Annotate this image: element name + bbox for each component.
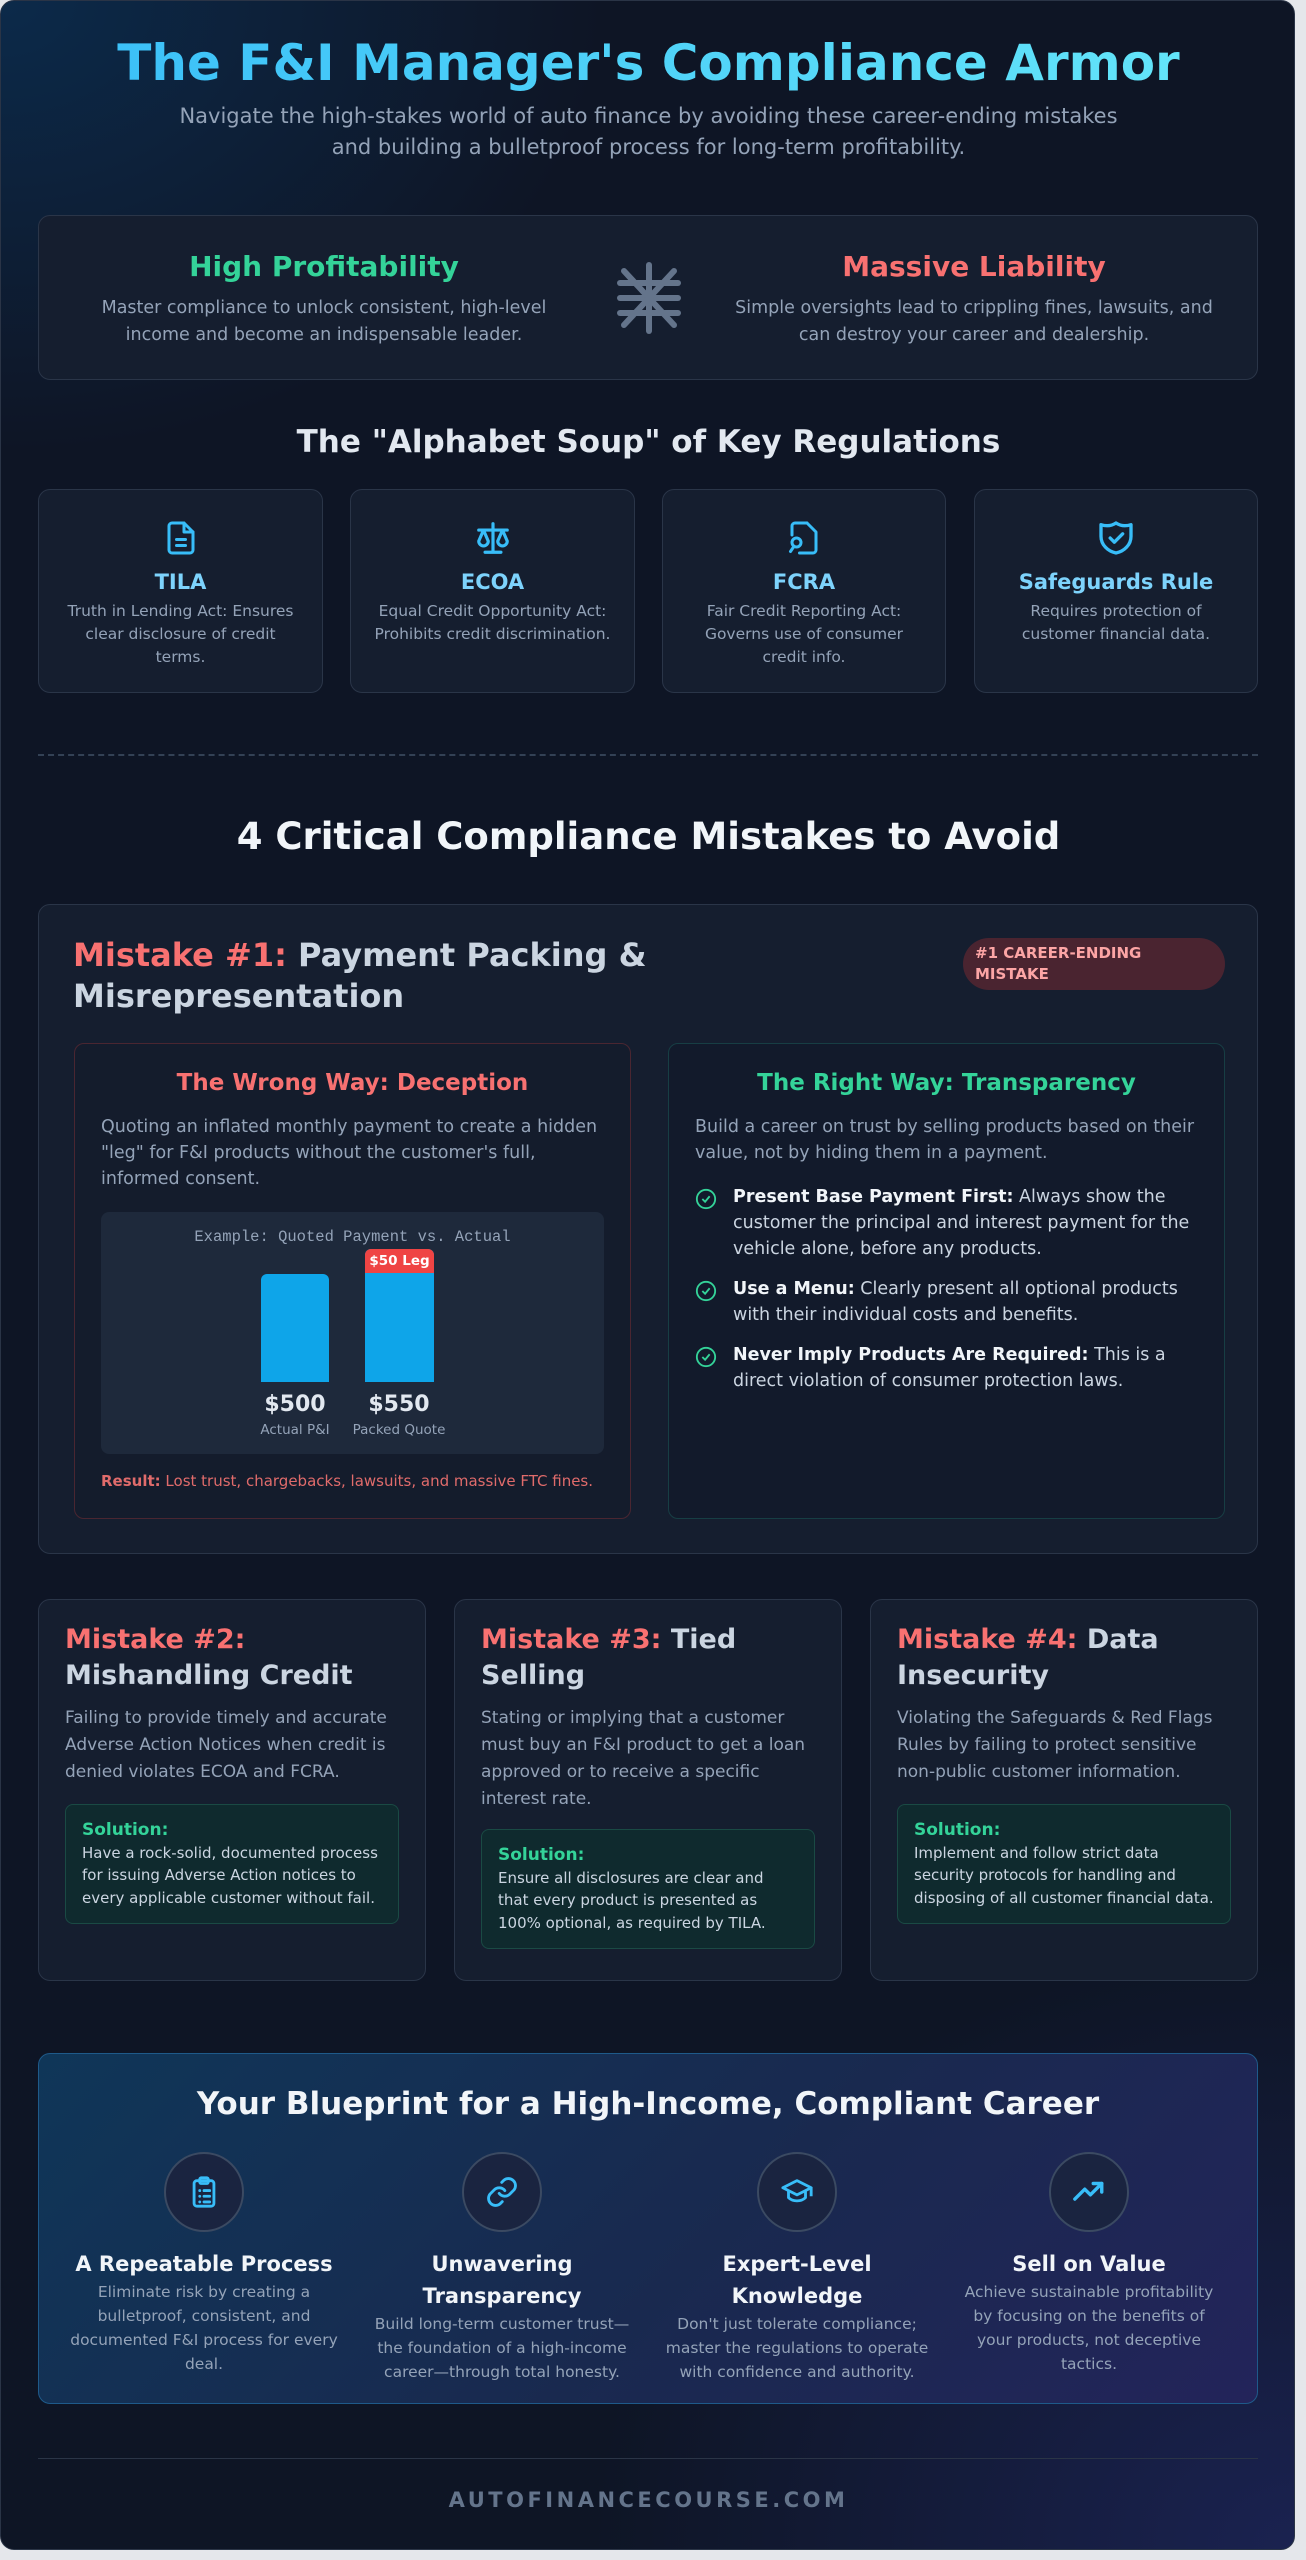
panel: mistake 1 xyxy=(38,904,1258,1554)
solution xyxy=(65,1804,399,1924)
panel: mistake 3 xyxy=(454,1599,842,1981)
item: transparency xyxy=(375,2152,629,2381)
solution: Ensure all disclosures are clear and that every product is presented as 100% optional, as required by TILA. xyxy=(498,1868,766,1932)
solution: Have a rock-solid, documented process for issuing Adverse Action notices to every applicable customer without fail. xyxy=(82,1844,378,1906)
subtitle: Navigate the high-stakes world of auto finance by avoiding these career-ending mistakes xyxy=(179,104,1118,128)
checklist: Use a Menu: Clearly present all optional products with their individual costs and benefits. xyxy=(733,1279,1178,1325)
reg card: Safeguards: Requires protection of customer financial data. xyxy=(1022,602,1210,643)
item: repeatable process xyxy=(70,2152,338,2373)
solution: Solution: xyxy=(82,1820,168,1840)
item: knowledge: Knowledge xyxy=(732,2284,862,2308)
reg card: ECOA xyxy=(350,489,635,693)
item: sell on value: Sell on Value xyxy=(1012,2252,1166,2276)
reg card: FCRA: Fair Credit Reporting Act: Governs use of consumer credit info. xyxy=(705,602,903,666)
wrong text: Quoting an inflated monthly payment to create a hidden "leg" for F&I products without the customer's full, informed consent. xyxy=(101,1117,597,1189)
item: knowledge xyxy=(666,2152,928,2381)
panel: mistake 3: Mistake #3: Tied Selling xyxy=(481,1624,736,1691)
panel: profitability vs liability xyxy=(38,215,1258,380)
high profitability: Master compliance to unlock consistent, high-level income and become an indispensable leader. xyxy=(102,298,546,345)
badge xyxy=(963,938,1225,990)
badge: #1 CAREER-ENDING MISTAKE xyxy=(975,944,1141,983)
bar chart xyxy=(101,1212,604,1454)
subtitle: and building a bulletproof process for long-term profitability. xyxy=(332,135,965,159)
reg card: Safeguards xyxy=(974,489,1258,693)
solution: Solution: xyxy=(914,1820,1000,1840)
right text: Build a career on trust by selling products based on their value, not by hiding them in a payment. xyxy=(695,1117,1194,1163)
mistake 1 title: Mistake #1: Payment Packing & Misrepresentation xyxy=(73,936,646,1015)
item: repeatable process: A Repeatable Process xyxy=(75,2252,333,2276)
reg card: ECOA: Equal Credit Opportunity Act: Prohibits credit discrimination. xyxy=(375,602,610,643)
solution xyxy=(897,1804,1231,1924)
panel: mistake 4: Violating the Safeguards & Red Flags Rules by failing to protect sensitive non-public customer information. xyxy=(897,1708,1212,1782)
bar chart: Actual P&I xyxy=(260,1422,330,1438)
icon: scales xyxy=(477,522,509,554)
icon: scale / balance xyxy=(617,262,681,334)
panel: mistake 4 xyxy=(870,1599,1258,1981)
item: sell on value: Achieve sustainable profitability by focusing on the benefits of your products, not deceptive tactics. xyxy=(965,2283,1213,2373)
reg card: FCRA: FCRA xyxy=(773,570,835,594)
panel: mistake 2: Mishandling Credit xyxy=(65,1660,353,1691)
reg card: ECOA: ECOA xyxy=(461,570,524,594)
right heading: The Right Way: Transparency xyxy=(757,1070,1136,1096)
wrong way panel xyxy=(74,1043,631,1519)
icon: document xyxy=(168,522,194,554)
item: transparency: Unwavering xyxy=(431,2252,573,2276)
massive liability: Simple oversights lead to crippling fines, lawsuits, and can destroy your career and dealership. xyxy=(735,298,1213,345)
bar chart: Example: Quoted Payment vs. Actual xyxy=(194,1228,511,1246)
checklist xyxy=(696,1187,1189,1391)
result: Result: Lost trust, chargebacks, lawsuits, and massive FTC fines. xyxy=(101,1472,593,1490)
blueprint title: Your Blueprint for a High-Income, Compliant Career xyxy=(197,2086,1099,2122)
high profitability xyxy=(102,250,546,345)
panel: blueprint xyxy=(38,2053,1258,2404)
reg card: TILA xyxy=(38,489,323,693)
subtitle xyxy=(179,104,1118,159)
bar chart: $550 xyxy=(368,1392,430,1417)
panel: mistake 4: Mistake #4: Data Insecurity xyxy=(897,1624,1159,1691)
title: The F&I Manager's Compliance Armor xyxy=(117,34,1180,92)
solution: Implement and follow strict data security protocols for handling and disposing of all customer financial data. xyxy=(914,1844,1214,1906)
bar chart: $500 xyxy=(264,1392,326,1417)
footer: AUTOFINANCECOURSE.COM xyxy=(449,2488,848,2512)
high profitability: High Profitability xyxy=(189,250,459,283)
massive liability: Massive Liability xyxy=(842,250,1106,283)
reg card: Safeguards: Safeguards Rule xyxy=(1019,570,1213,594)
item: transparency: Transparency xyxy=(423,2284,581,2308)
checklist: Present Base Payment First: Always show the customer the principal and interest payment for the vehicle alone, before any products. xyxy=(733,1187,1189,1259)
item: repeatable process: Eliminate risk by creating a bulletproof, consistent, and documented F&I process for every deal. xyxy=(70,2283,338,2373)
solution: Solution: xyxy=(498,1845,584,1865)
heading: 4 critical mistakes: 4 Critical Compliance Mistakes to Avoid xyxy=(237,815,1060,858)
panel: mistake 2: Failing to provide timely and accurate Adverse Action Notices when credit is denied violates ECOA and FCRA. xyxy=(65,1708,387,1782)
panel: mistake 3: Stating or implying that a customer must buy an F&I product to get a loan approved or to receive a specific interest rate. xyxy=(481,1708,805,1809)
heading: alphabet soup: The "Alphabet Soup" of Key Regulations xyxy=(297,424,1000,460)
item: sell on value xyxy=(964,2152,1213,2373)
item: knowledge: Expert-Level xyxy=(722,2252,872,2276)
solution xyxy=(481,1829,815,1949)
right way panel xyxy=(668,1043,1225,1519)
massive liability xyxy=(735,250,1213,345)
icon: shield check xyxy=(1099,521,1133,555)
item: knowledge: Don't just tolerate compliance; master the regulations to operate with confidence and authority. xyxy=(666,2315,928,2381)
reg card: FCRA xyxy=(662,489,946,693)
bar chart: Packed Quote xyxy=(353,1422,445,1438)
checklist: Never Imply Products Are Required: This is a direct violation of consumer protection laws. xyxy=(733,1345,1166,1391)
reg card: TILA: Truth in Lending Act: Ensures clear disclosure of credit terms. xyxy=(68,602,293,666)
panel: mistake 2 xyxy=(38,1599,426,1981)
reg card: TILA: TILA xyxy=(155,570,206,594)
wrong heading: The Wrong Way: Deception xyxy=(177,1070,528,1096)
icon: file search xyxy=(788,521,818,554)
item: transparency: Build long-term customer trust—the foundation of a high-income career—through total honesty. xyxy=(375,2315,629,2381)
bar chart: $50 Leg xyxy=(369,1253,430,1269)
panel: mistake 2: Mistake #2: xyxy=(65,1624,245,1655)
